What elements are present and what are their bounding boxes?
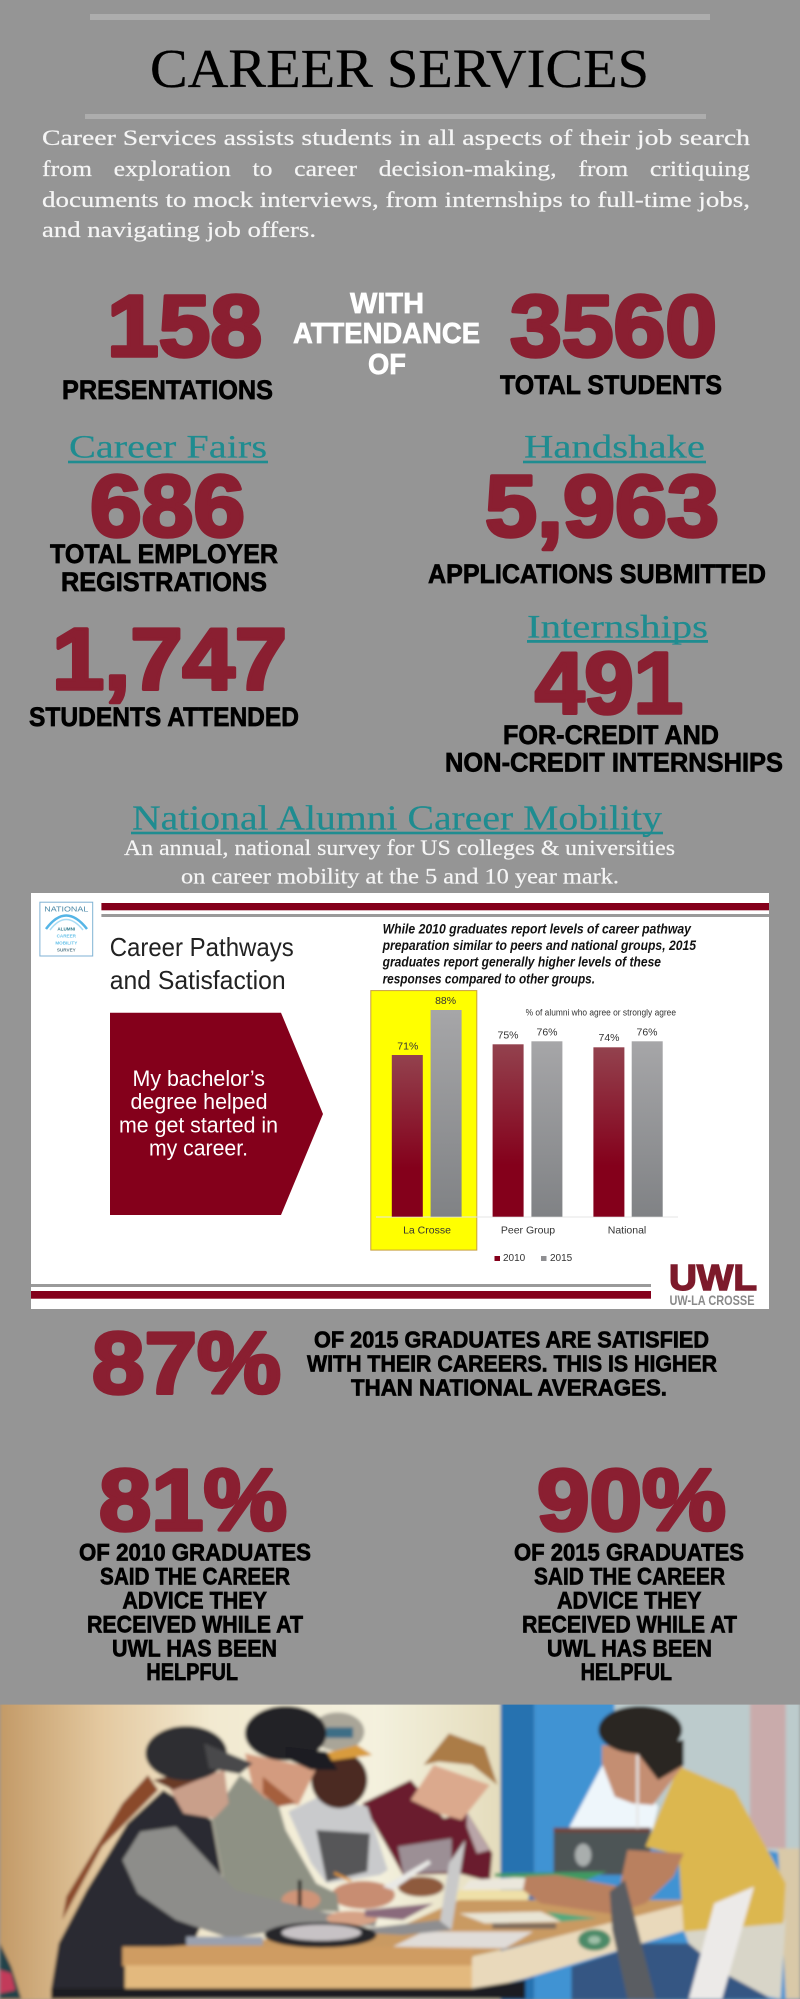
icon: national alumni career mobility survey logo: ALUMNI <box>57 926 75 932</box>
arrow callout: bachelor's degree statement <box>110 1013 323 1215</box>
panel: career pathways slide <box>31 893 769 1309</box>
stat: 491 internships: FOR-CREDIT AND <box>503 720 719 750</box>
survey description: on career mobility at the 5 and 10 year mark. <box>181 863 619 888</box>
bars: la crosse: 71% <box>397 1040 418 1052</box>
slide title: and Satisfaction <box>110 965 286 995</box>
stat description: OF 2010 GRADUATES <box>79 1540 311 1567</box>
connector: with attendance of: ATTENDANCE <box>293 318 480 350</box>
chart headline <box>382 920 696 986</box>
bars: national <box>593 1026 663 1237</box>
stat: 686 employer registrations <box>50 458 278 597</box>
photo: students working at a table <box>0 1700 800 1999</box>
legend: 2015 <box>550 1253 573 1264</box>
intro paragraph: documents to mock interviews, from internships to full-time jobs, <box>42 187 750 212</box>
section: handshake <box>428 430 766 589</box>
intro paragraph: Career Services assists students in all aspects of their job search <box>42 125 750 150</box>
stat: 686 employer registrations: 686 <box>90 458 245 555</box>
bars: peer group <box>493 1026 562 1237</box>
icon: national alumni career mobility survey logo: MOBILITY <box>55 940 77 946</box>
title: CAREER SERVICES <box>150 38 649 99</box>
stat: 81% of 2010 graduates <box>79 1452 311 1686</box>
survey description <box>124 835 675 888</box>
chart headline: graduates report generally higher levels of these <box>382 954 661 970</box>
arrow callout: bachelor's degree statement: my career. <box>149 1136 248 1161</box>
stat description: SAID THE CAREER <box>534 1563 725 1590</box>
stat: 81% of 2010 graduates: 81% <box>99 1452 287 1549</box>
stat: 491 internships <box>445 635 783 778</box>
stat: 491 internships: NON-CREDIT INTERNSHIPS <box>445 748 783 778</box>
stat: 90% of 2015 graduates: 90% <box>537 1452 726 1549</box>
stat description <box>307 1326 717 1401</box>
legend: 2010 <box>503 1253 526 1264</box>
stat description: SAID THE CAREER <box>100 1563 290 1590</box>
backpack <box>0 1943 21 1999</box>
icon: national alumni career mobility survey logo: CAREER <box>57 934 77 938</box>
chairs and skateboard <box>610 1880 656 1999</box>
heading: career fairs: Career Fairs <box>69 430 267 466</box>
bars: la crosse: La Crosse <box>403 1225 451 1237</box>
highlight: la crosse <box>371 991 477 1250</box>
heading: internships: Internships <box>527 609 708 645</box>
slide title: Career Pathways <box>110 932 294 962</box>
person: man in hoodie <box>212 1775 339 1912</box>
connector: with attendance of: OF <box>368 349 406 381</box>
stat: 158 presentations <box>62 278 273 405</box>
legend <box>494 1253 573 1264</box>
stat: 1,747 students attended: STUDENTS ATTENDED <box>29 702 299 732</box>
bars: national: 74% <box>598 1032 620 1044</box>
stat: 5,963 applications submitted <box>428 458 766 589</box>
survey description: An annual, national survey for US colleges & universities <box>124 835 675 860</box>
section: internships <box>445 609 783 778</box>
bars: peer group: Peer Group <box>501 1225 555 1237</box>
stat description: ADVICE THEY <box>557 1587 702 1614</box>
heading: national alumni career mobility: National Alumni Career Mobility <box>132 798 663 837</box>
stat description: HELPFUL <box>146 1659 238 1686</box>
section: career fairs <box>29 430 299 732</box>
header: title block <box>85 14 710 119</box>
wall and window <box>0 1700 501 1999</box>
stat: 87% satisfied: 87% <box>92 1315 281 1412</box>
bars: la crosse <box>392 995 462 1237</box>
stat description: UWL HAS BEEN <box>547 1635 712 1662</box>
heading: handshake: Handshake <box>524 430 705 466</box>
chart headline: While 2010 graduates report levels of career pathway <box>383 920 692 936</box>
table <box>122 1900 684 1957</box>
person: man in grey tee <box>288 1797 388 1883</box>
arrow callout: bachelor's degree statement: degree helped <box>130 1089 268 1114</box>
connector: with attendance of <box>293 288 480 381</box>
papers and laptop <box>393 1932 533 1948</box>
bars: national: 76% <box>636 1026 658 1038</box>
stat: 158 presentations: PRESENTATIONS <box>62 375 273 405</box>
chart headline: preparation similar to peers and national groups, 2015 <box>382 937 696 953</box>
stat description: UWL HAS BEEN <box>112 1635 277 1662</box>
icon: national alumni career mobility survey logo: SURVEY <box>57 948 76 952</box>
person: man in maroon shirt <box>362 1780 492 1882</box>
stat: 90% of 2015 graduates <box>514 1452 744 1686</box>
bars: peer group: 75% <box>497 1029 519 1041</box>
icon: national alumni career mobility survey logo: NATIONAL <box>44 906 88 914</box>
chart headline: responses compared to other groups. <box>383 970 595 986</box>
icon: uw-la crosse logo: UWL <box>669 1257 757 1298</box>
connector: with attendance of: WITH <box>350 288 424 320</box>
bars: peer group: 76% <box>536 1026 558 1038</box>
bars: national: National <box>608 1225 646 1237</box>
stat description: THAN NATIONAL AVERAGES. <box>351 1375 667 1401</box>
intro paragraph <box>42 125 750 242</box>
bar chart: career pathways by group <box>371 991 678 1264</box>
stat: 1,747 students attended: 1,747 <box>52 611 287 708</box>
stat description <box>514 1540 744 1686</box>
stat: 87% satisfied <box>92 1315 717 1412</box>
stat description <box>79 1540 311 1686</box>
intro paragraph: from exploration to career decision-making, from critiquing <box>42 156 750 181</box>
stat: 158 presentations: 158 <box>107 278 262 375</box>
stat description: RECEIVED WHILE AT <box>522 1611 737 1638</box>
stat: 3560 total students: 3560 <box>510 278 717 375</box>
stat: 3560 total students: TOTAL STUDENTS <box>500 370 722 400</box>
intro paragraph: and navigating job offers. <box>42 217 316 242</box>
stat description: WITH THEIR CAREERS. THIS IS HIGHER <box>307 1351 717 1377</box>
stat: 686 employer registrations: REGISTRATIONS <box>61 567 267 597</box>
axis title: % of alumni who agree or strongly agree <box>526 1008 676 1018</box>
stat: 1,747 students attended <box>29 611 299 732</box>
bars: la crosse: 88% <box>435 995 456 1007</box>
stat: 3560 total students <box>500 278 722 400</box>
arrow callout: bachelor's degree statement: me get started in <box>119 1112 278 1137</box>
stat description: OF 2015 GRADUATES ARE SATISFIED <box>314 1326 709 1352</box>
stat: 5,963 applications submitted: APPLICATIONS SUBMITTED <box>428 559 766 589</box>
stat: 686 employer registrations: TOTAL EMPLOYER <box>50 539 278 569</box>
arrow callout: bachelor's degree statement: My bachelor’s <box>132 1066 265 1091</box>
stat description: ADVICE THEY <box>122 1587 267 1614</box>
stat description: OF 2015 GRADUATES <box>514 1540 744 1567</box>
person: woman in vest <box>51 1790 222 1999</box>
far right chair <box>778 1848 800 1999</box>
stat: 5,963 applications submitted: 5,963 <box>485 458 719 555</box>
icon: national alumni career mobility survey logo <box>40 902 93 956</box>
stat description: HELPFUL <box>581 1659 672 1686</box>
person: man in yellow shirt <box>571 1943 770 1999</box>
stat: 491 internships: 491 <box>535 635 683 732</box>
icon: uw-la crosse logo: UW-LA CROSSE <box>670 1292 754 1308</box>
slide title <box>110 932 294 995</box>
stat description: RECEIVED WHILE AT <box>87 1611 303 1638</box>
